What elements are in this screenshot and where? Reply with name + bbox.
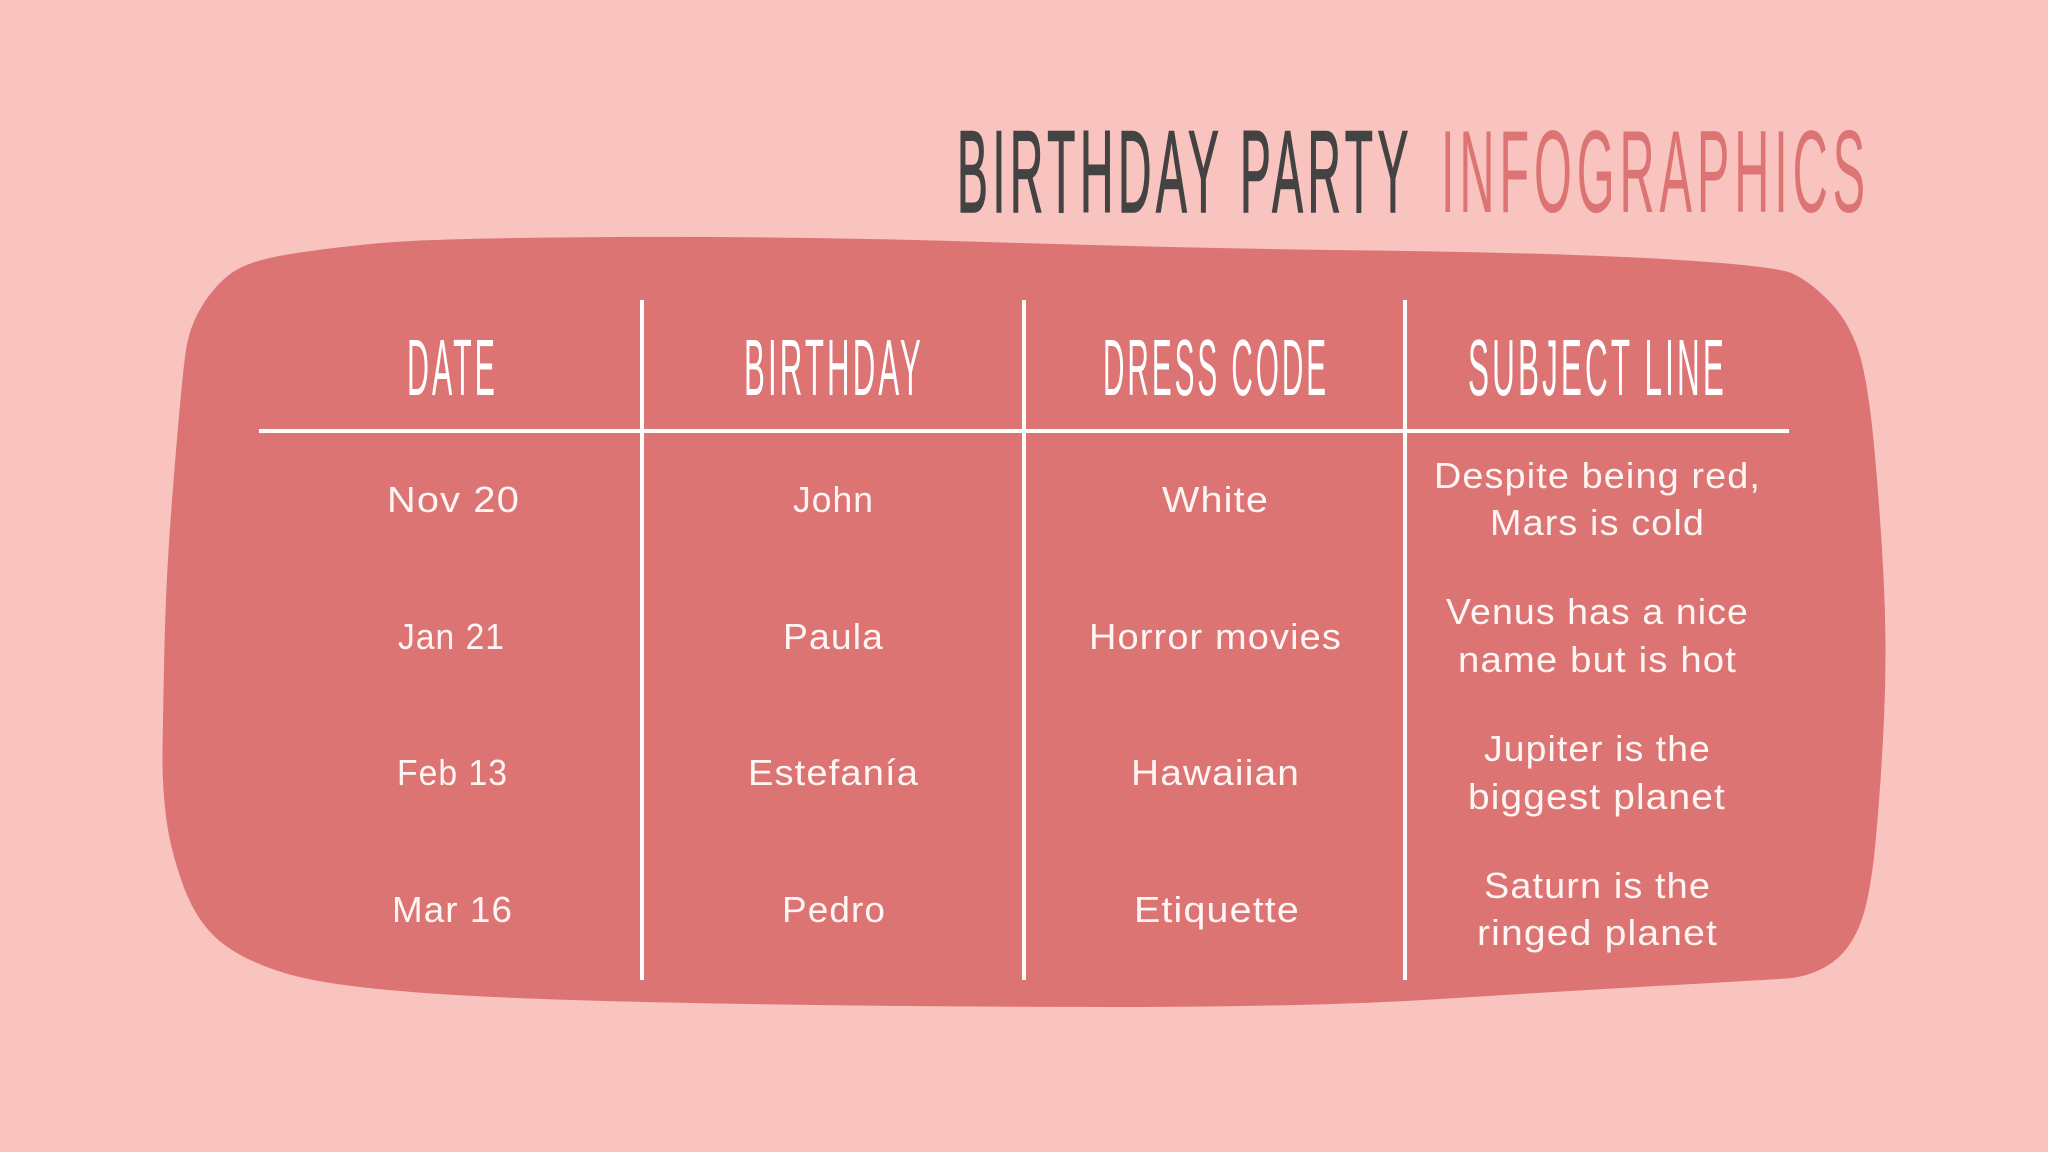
table header row: BIRTHDAY [744, 323, 924, 412]
row: Jan 21: Venus has a nice [1446, 591, 1749, 632]
row: Mar 16: ringed planet [1477, 912, 1718, 953]
row: Feb 13: Jupiter is the [1484, 728, 1711, 769]
row: Nov 20 [387, 455, 1761, 543]
table grid lines [259, 300, 1789, 980]
table header row: DRESS CODE [1103, 323, 1329, 412]
row: Jan 21: Jan 21 [398, 616, 505, 657]
row: Nov 20: Mars is cold [1490, 502, 1705, 543]
table header row [407, 323, 1727, 412]
panel: table background blob [162, 237, 1885, 1007]
row: Feb 13: biggest planet [1468, 776, 1726, 817]
row: Feb 13: Feb 13 [397, 752, 508, 793]
row: Mar 16: Pedro [782, 889, 886, 930]
row: Nov 20: White [1162, 479, 1269, 520]
row: Mar 16: Etiquette [1134, 889, 1300, 930]
table header row: DATE [407, 323, 498, 412]
row: Nov 20: Despite being red, [1434, 455, 1761, 496]
row: Nov 20: John [793, 479, 874, 520]
row: Feb 13: Estefanía [748, 752, 919, 793]
row: Mar 16 [392, 865, 1718, 953]
row: Jan 21: name but is hot [1458, 639, 1737, 680]
row: Feb 13: Hawaiian [1131, 752, 1300, 793]
row: Mar 16: Mar 16 [392, 889, 513, 930]
row: Mar 16: Saturn is the [1484, 865, 1711, 906]
row: Jan 21 [398, 591, 1749, 680]
row: Feb 13 [397, 728, 1726, 817]
row: Jan 21: Horror movies [1089, 616, 1342, 657]
row: Nov 20: Nov 20 [387, 479, 520, 520]
row: Jan 21: Paula [783, 616, 884, 657]
